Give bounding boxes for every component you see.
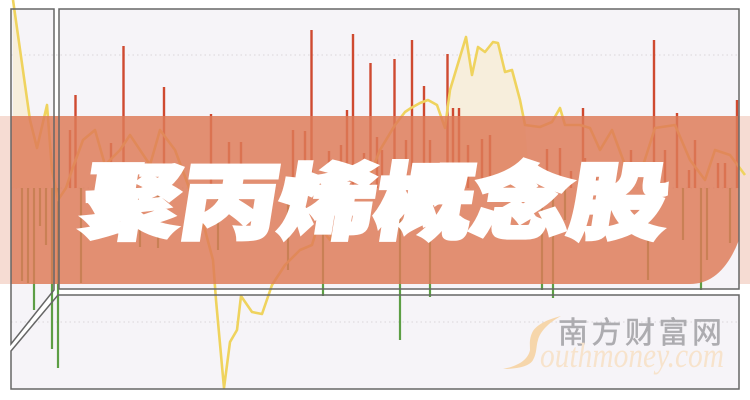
band: light title strip xyxy=(0,116,750,284)
icon: swoosh S xyxy=(503,316,561,369)
band: orange title strip xyxy=(11,116,739,284)
watermark: Chinese name: 南方财富网 xyxy=(558,317,722,350)
watermark: southmoney logo xyxy=(503,316,724,375)
chart: green down volume bars xyxy=(22,188,730,368)
chart: red up volume bars xyxy=(70,30,737,188)
chart: yellow area under line xyxy=(13,0,530,188)
title: 聚丙烯概念股 xyxy=(76,156,675,250)
